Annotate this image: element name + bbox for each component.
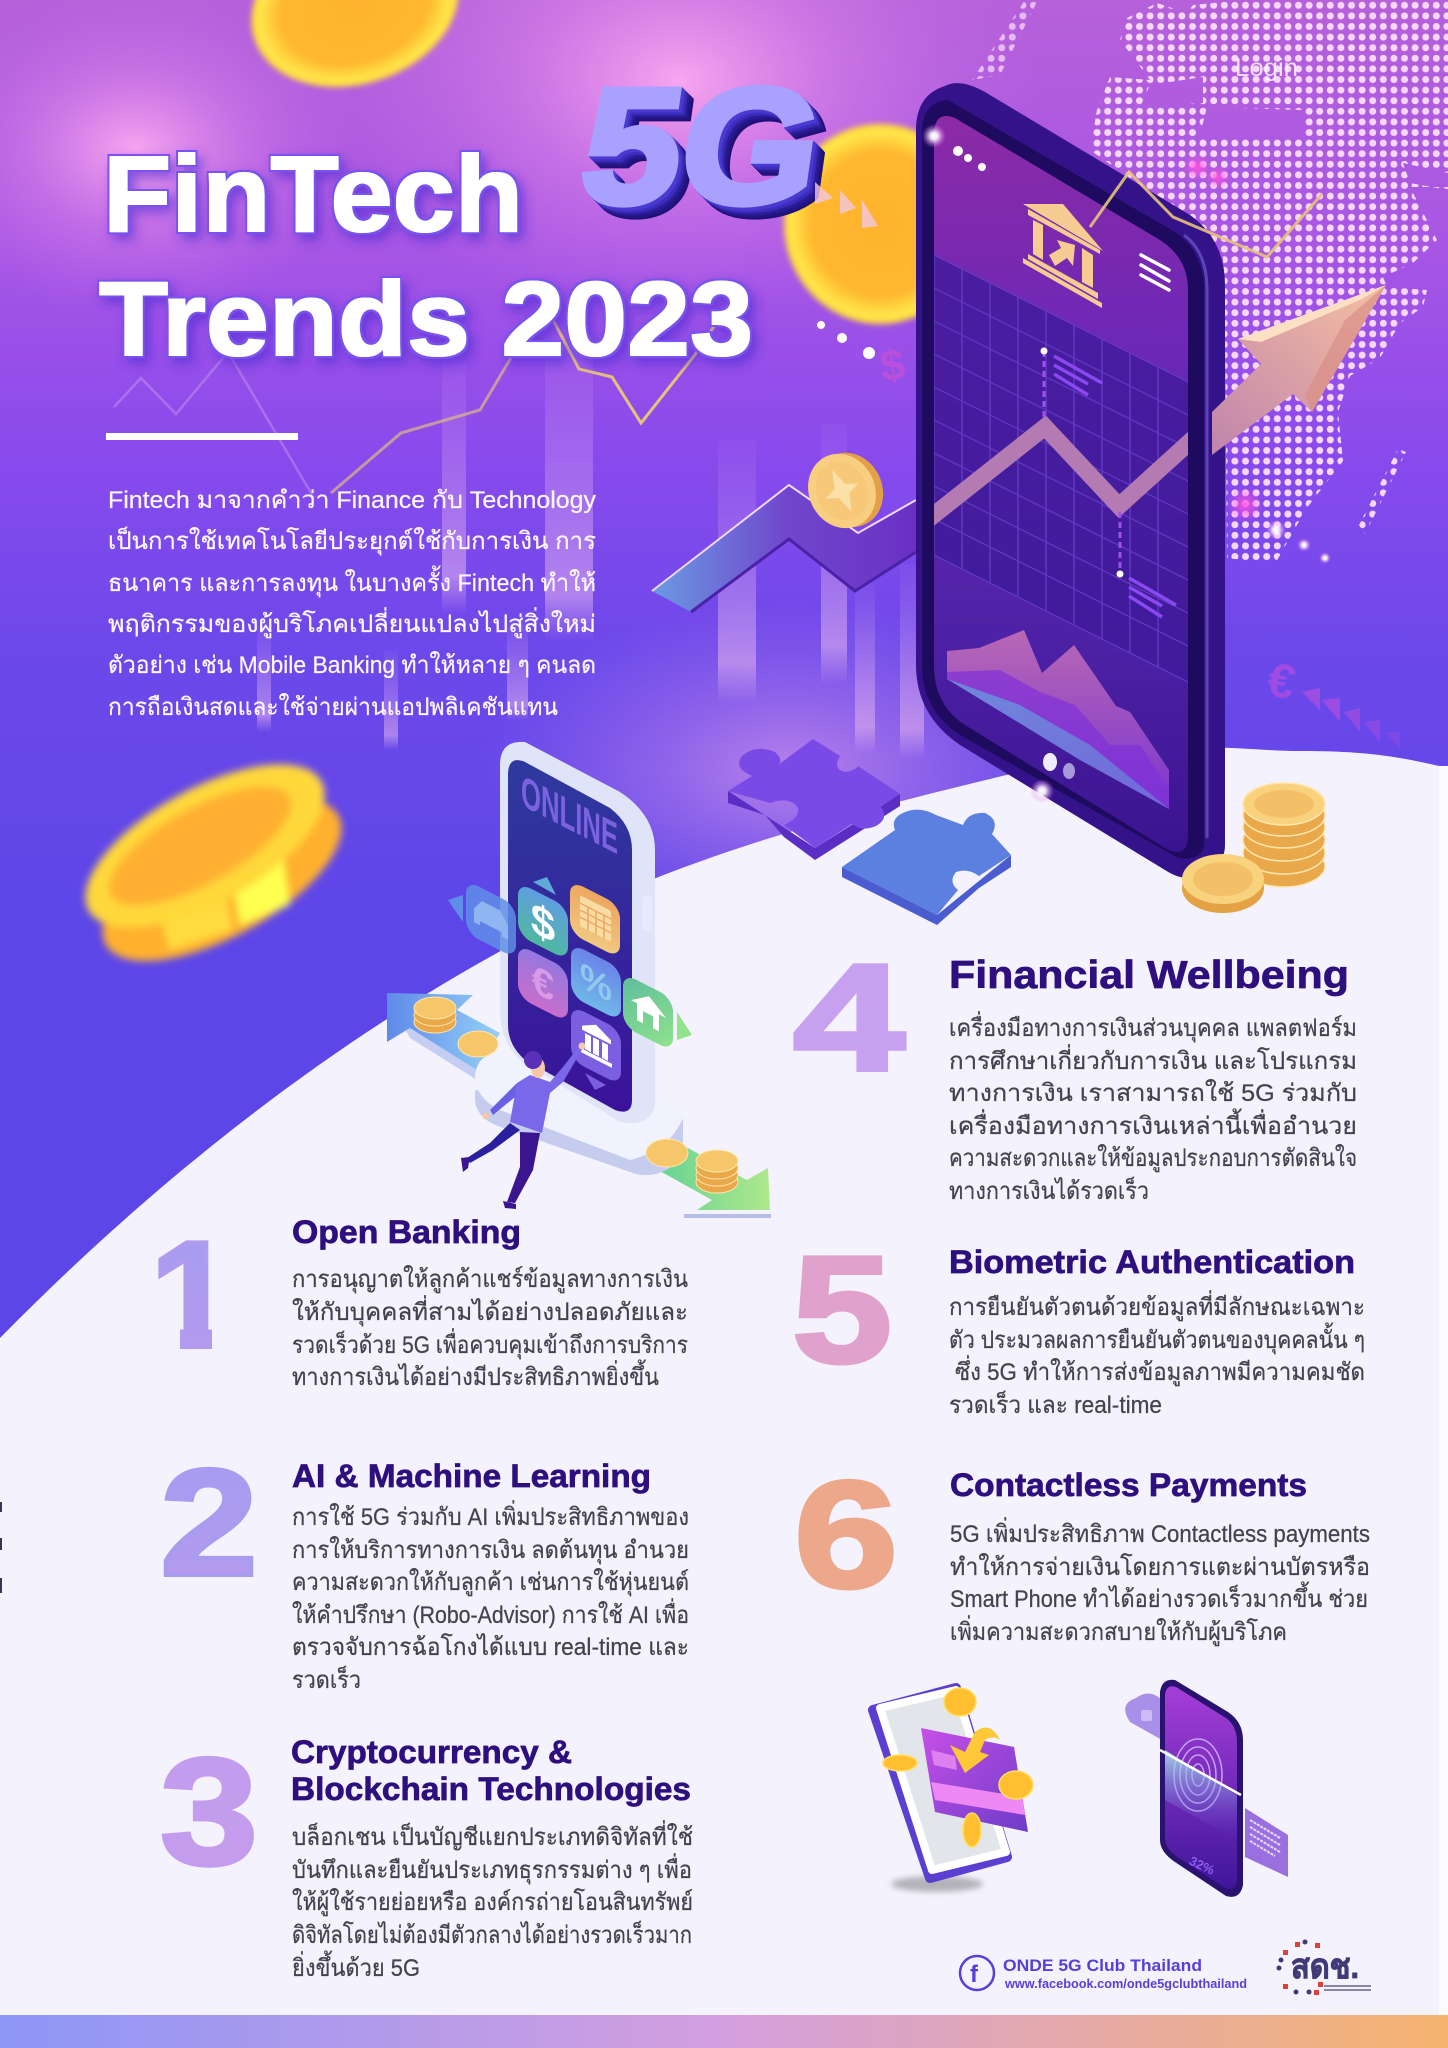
intro paragraph: ธนาคาร และการลงทุน ในบางครั้ง Fintech ทำให้: [108, 565, 596, 598]
status dots: [953, 146, 986, 171]
chart callouts: [1040, 348, 1176, 617]
gold coins on arrows: [414, 997, 738, 1193]
screen area chart: [947, 630, 1169, 809]
section 2 AI: [160, 1438, 689, 1694]
calendar tile: [570, 880, 620, 958]
blurred coin top: [230, 0, 480, 113]
section 4 financial wellbeing: ทางการเงิน เราสามารถใช้ 5G ร่วมกับ: [949, 1079, 1357, 1107]
login label: Login: [1235, 54, 1298, 82]
lone coin right: [1182, 854, 1264, 913]
large phone: [916, 83, 1225, 878]
section 2 AI: การใช้ 5G ร่วมกับ AI เพิ่มประสิทธิภาพของ: [292, 1500, 689, 1531]
small triangles around tiles: [448, 877, 692, 1090]
section 2 AI: 2: [160, 1438, 258, 1608]
section 3 crypto: บล็อกเชน เป็นบัญชีแยกประเภทดิจิทัลที่ใช้: [292, 1820, 693, 1851]
rising arrow: [1212, 285, 1386, 455]
section 6 contactless: 6: [794, 1450, 898, 1620]
facebook credit: www.facebook.com/onde5gclubthailand: [1004, 1976, 1247, 1991]
footer gradient bar: [0, 2015, 1448, 2048]
bank icon: [1023, 204, 1103, 308]
data card: [1245, 1808, 1288, 1877]
section 4 financial wellbeing: Financial Wellbeing: [949, 954, 1349, 997]
stand: [475, 1055, 683, 1175]
intro paragraph: ตัวอย่าง เช่น Mobile Banking ทำให้หลาย ๆ คนลด: [108, 651, 596, 679]
section 6 contactless: Smart Phone ทำได้อย่างรวดเร็วมากขึ้น ช่วย: [950, 1581, 1368, 1613]
5G 3D heading: 5G: [571, 55, 833, 239]
section 6 contactless: [794, 1450, 1370, 1647]
section 3 crypto: ให้ผู้ใช้รายย่อยหรือ องค์กรถ่ายโอนสินทรัพย์: [292, 1888, 693, 1917]
percent tile: %: [580, 955, 612, 1011]
coins: [883, 1688, 1033, 1847]
home tile: [623, 973, 673, 1051]
ONLINE text: ONLINE: [521, 765, 618, 864]
fingerprint: [1174, 1739, 1222, 1811]
สดช logo: สดช.: [1291, 1948, 1359, 1986]
cloud with lock: [1125, 1693, 1162, 1740]
gold line over phone: [1090, 172, 1322, 257]
section 4 financial wellbeing: 4: [793, 933, 905, 1103]
phone: [873, 1688, 1007, 1878]
section 4 financial wellbeing: เครื่องมือทางการเงินส่วนบุคคล แพลตฟอร์ม: [949, 1011, 1357, 1043]
section 1 open banking: รวดเร็วด้วย 5G เพื่อควบคุมเข้าถึงการบริการ: [292, 1328, 688, 1360]
section 4 financial wellbeing: เครื่องมือทางการเงินเหล่านี้เพื่ออำนวย: [949, 1108, 1357, 1140]
intro paragraph: [108, 487, 596, 721]
section 2 AI: การให้บริการทางการเงิน ลดต้นทุน อำนวย: [292, 1536, 689, 1565]
dollar tile: $: [531, 892, 555, 953]
small triangles near 5G: [815, 182, 878, 228]
section 6 contactless: 5G เพิ่มประสิทธิภาพ Contactless payments: [950, 1517, 1370, 1548]
dollar sign and glow dots: [817, 321, 908, 392]
phone screen: [1165, 1686, 1237, 1889]
section 5 biometric: รวดเร็ว และ real-time: [949, 1390, 1162, 1419]
home dots: [1043, 753, 1075, 779]
section 5 biometric: ซึ่ง 5G ทำให้การส่งข้อมูลภาพมีความคมชัด: [955, 1355, 1365, 1387]
percent tile: [571, 943, 621, 1021]
blue arrow: [387, 993, 500, 1080]
section 3 crypto: บันทึกและยืนยันประเภทธุรกรรมต่าง ๆ เพื่อ: [292, 1853, 692, 1885]
section 1 open banking: [150, 1210, 688, 1391]
green arrow: [640, 1133, 771, 1218]
section 1 open banking: 1: [150, 1210, 235, 1380]
gold line chart: [331, 320, 715, 493]
purple puzzle piece: [728, 739, 900, 860]
section 2 AI: ตรวจจับการฉ้อโกงได้แบบ real-time และ: [292, 1633, 689, 1661]
yellow arrow: [950, 1728, 1000, 1773]
phone body: [1160, 1680, 1243, 1897]
screen glow sparks: [922, 124, 1331, 803]
section 5 biometric: 5: [792, 1225, 892, 1395]
section 1 open banking: การอนุญาตให้ลูกค้าแชร์ข้อมูลทางการเงิน: [292, 1265, 688, 1294]
phone screen: [934, 116, 1188, 852]
section 1 open banking: ให้กับบุคคลที่สามได้อย่างปลอดภัยและ: [292, 1295, 688, 1327]
section 3 crypto: ดิจิทัลโดยไม่ต้องมีตัวกลางได้อย่างรวดเร็วมาก: [292, 1920, 692, 1949]
faint line chart: [114, 352, 314, 498]
facebook credit: ONDE 5G Club Thailand: [1003, 1956, 1202, 1975]
section 2 AI: ความสะดวกให้กับลูกค้า เช่นการใช้หุ่นยนต์: [292, 1568, 689, 1597]
section 1 open banking: ทางการเงินได้อย่างมีประสิทธิภาพยิ่งขึ้น: [292, 1359, 659, 1391]
section 3 crypto: [160, 1727, 693, 1982]
car tile: [466, 880, 516, 958]
blue puzzle piece: [842, 810, 1011, 925]
section 6 contactless: ทำให้การจ่ายเงินโดยการแตะผ่านบัตรหรือ: [950, 1553, 1370, 1581]
side button: [642, 895, 652, 931]
title: Trends 2023: [99, 261, 753, 378]
shadow: [891, 1876, 983, 1892]
section 5 biometric: [792, 1225, 1365, 1419]
section 5 biometric: ตัว ประมวลผลการยืนยันตัวตนของบุคคลนั้น ๆ: [949, 1322, 1365, 1355]
scan band: [1165, 1750, 1237, 1840]
section 3 crypto: 3: [160, 1727, 258, 1897]
section 4 financial wellbeing: การศึกษาเกี่ยวกับการเงิน และโปรแกรม: [949, 1044, 1357, 1075]
intro paragraph: เป็นการใช้เทคโนโลยีประยุกต์ใช้กับการเงิน การ: [108, 526, 596, 556]
blurred big coin left: [61, 732, 365, 993]
dollar tile: [518, 882, 568, 960]
intro paragraph: Fintech มาจากคำว่า Finance กับ Technology: [108, 487, 596, 514]
blurred coin behind phone: [784, 124, 976, 324]
section 5 biometric: การยืนยันตัวตนด้วยข้อมูลที่มีลักษณะเฉพาะ: [949, 1290, 1365, 1322]
person: [461, 1042, 586, 1209]
card: [921, 1728, 1028, 1832]
intro paragraph: พฤติกรรมของผู้บริโภคเปลี่ยนแปลงไปสู่สิ่งใหม่: [108, 607, 596, 639]
dollar sign and glow dots: $: [877, 340, 908, 392]
section 3 crypto: Blockchain Technologies: [291, 1771, 691, 1807]
hamburger menu: [1141, 255, 1169, 290]
coin on ribbon: [796, 440, 895, 541]
euro tile: €: [532, 956, 554, 1012]
section 4 financial wellbeing: [793, 933, 1357, 1205]
3D ribbon chart: [652, 485, 916, 612]
world map dots: [972, 0, 1448, 564]
contactless payment illustration: [873, 1688, 1033, 1892]
phone body: [500, 742, 655, 1123]
euro sign and triangles: €: [1263, 653, 1300, 710]
left edge cropped marks: [0, 1502, 2, 1593]
section 3 crypto: ยิ่งขึ้นด้วย 5G: [292, 1950, 420, 1982]
section 2 AI: AI & Machine Learning: [292, 1458, 651, 1494]
numbers and section text: [150, 933, 1370, 1982]
section 4 financial wellbeing: ความสะดวกและให้ข้อมูลประกอบการตัดสินใจ: [949, 1144, 1357, 1173]
progress text: 32%: [1187, 1853, 1217, 1878]
facebook credit: [960, 1956, 1247, 1991]
coin stack right: [1243, 783, 1325, 887]
section 5 biometric: Biometric Authentication: [949, 1244, 1355, 1280]
section 6 contactless: Contactless Payments: [950, 1467, 1307, 1503]
bank tile: [571, 1005, 621, 1085]
สดช logo: [1276, 1940, 1371, 1995]
screen contents: [925, 255, 1195, 809]
title: FinTech: [103, 133, 523, 254]
euro tile: [518, 944, 568, 1022]
white curved panel: [0, 748, 1448, 2048]
screen grid: [934, 255, 1190, 683]
euro sign and triangles: [1263, 653, 1400, 750]
intro paragraph: การถือเงินสดและใช้จ่ายผ่านแอปพลิเคชันแทน: [108, 693, 558, 721]
section 2 AI: รวดเร็ว: [292, 1665, 361, 1694]
screen line chart: [925, 427, 1195, 522]
section 1 open banking: Open Banking: [292, 1214, 521, 1250]
phone screen: [508, 760, 632, 1112]
biometric phone illustration: [1125, 1680, 1288, 1897]
section 2 AI: ให้คำปรึกษา (Robo-Advisor) การใช้ AI เพื่อ: [292, 1598, 689, 1629]
section 3 crypto: Cryptocurrency &: [291, 1734, 572, 1770]
chart light pillars: [257, 335, 924, 758]
title underline: [106, 433, 298, 440]
title: [99, 133, 753, 378]
facebook credit: f: [970, 1961, 979, 1988]
online phone illustration: [387, 742, 771, 1218]
section 6 contactless: เพิ่มความสะดวกสบายให้กับผู้บริโภค: [950, 1615, 1287, 1647]
section 4 financial wellbeing: ทางการเงินได้รวดเร็ว: [949, 1176, 1149, 1205]
